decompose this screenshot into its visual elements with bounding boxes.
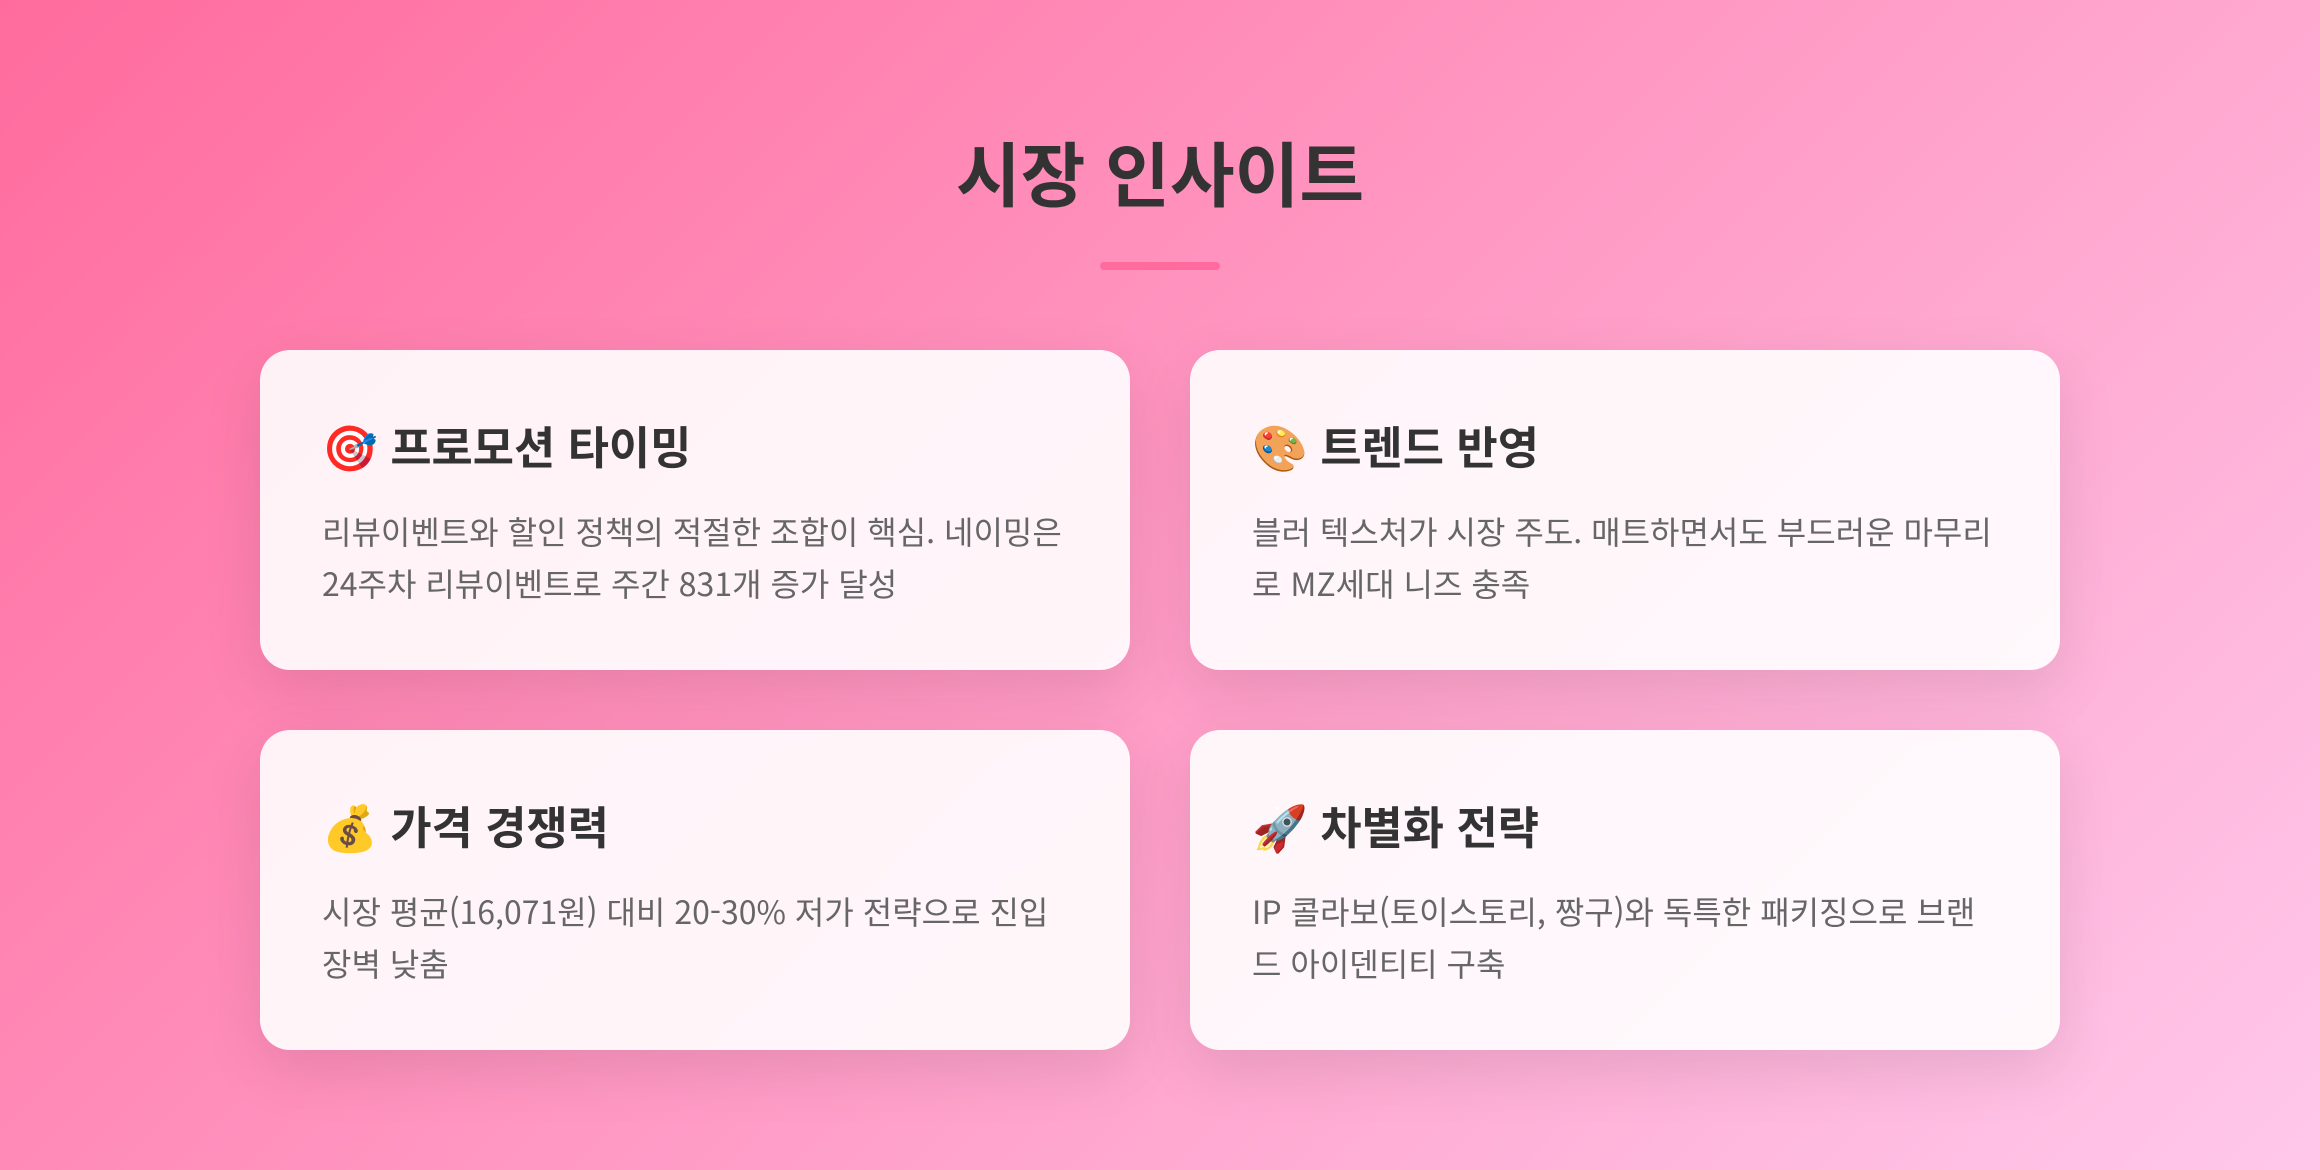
text: price competitiveness: [322, 888, 1048, 986]
text: differentiation strategy: IP 콜라보(토이스토리, 짱구)와 독특한 패키징으로 브랜: [1252, 888, 1975, 934]
panel: price competitiveness: [260, 730, 1130, 1050]
text: differentiation strategy: [1252, 888, 1975, 986]
text: price competitiveness: 시장 평균(16,071원) 대비 20-30% 저가 전략으로 진입: [322, 888, 1048, 934]
panel: promotion timing: [260, 350, 1130, 670]
text: differentiation strategy: 드 아이덴티티 구축: [1252, 940, 1505, 986]
text: trend reflection: [1252, 508, 1992, 606]
text: trend reflection: 로 MZ세대 니즈 충족: [1252, 560, 1530, 606]
panel: trend reflection: [1190, 350, 2060, 670]
text: trend reflection: 블러 텍스처가 시장 주도. 매트하면서도 부드러운 마무리: [1252, 508, 1992, 554]
text: price competitiveness: 장벽 낮춤: [322, 940, 449, 986]
heading: price competitiveness: 💰 가격 경쟁력: [322, 792, 609, 857]
heading: promotion timing: 🎯 프로모션 타이밍: [322, 412, 691, 477]
text: promotion timing: [322, 508, 1062, 606]
title: 시장 인사이트: [956, 120, 1364, 222]
heading: trend reflection: 🎨 트렌드 반영: [1252, 412, 1539, 477]
heading: differentiation strategy: 🚀 차별화 전략: [1252, 792, 1539, 857]
text: promotion timing: 24주차 리뷰이벤트로 주간 831개 증가 달성: [322, 560, 897, 606]
text: promotion timing: 리뷰이벤트와 할인 정책의 적절한 조합이 핵심. 네이밍은: [322, 508, 1062, 554]
title underline: [1100, 262, 1220, 270]
panel: differentiation strategy: [1190, 730, 2060, 1050]
